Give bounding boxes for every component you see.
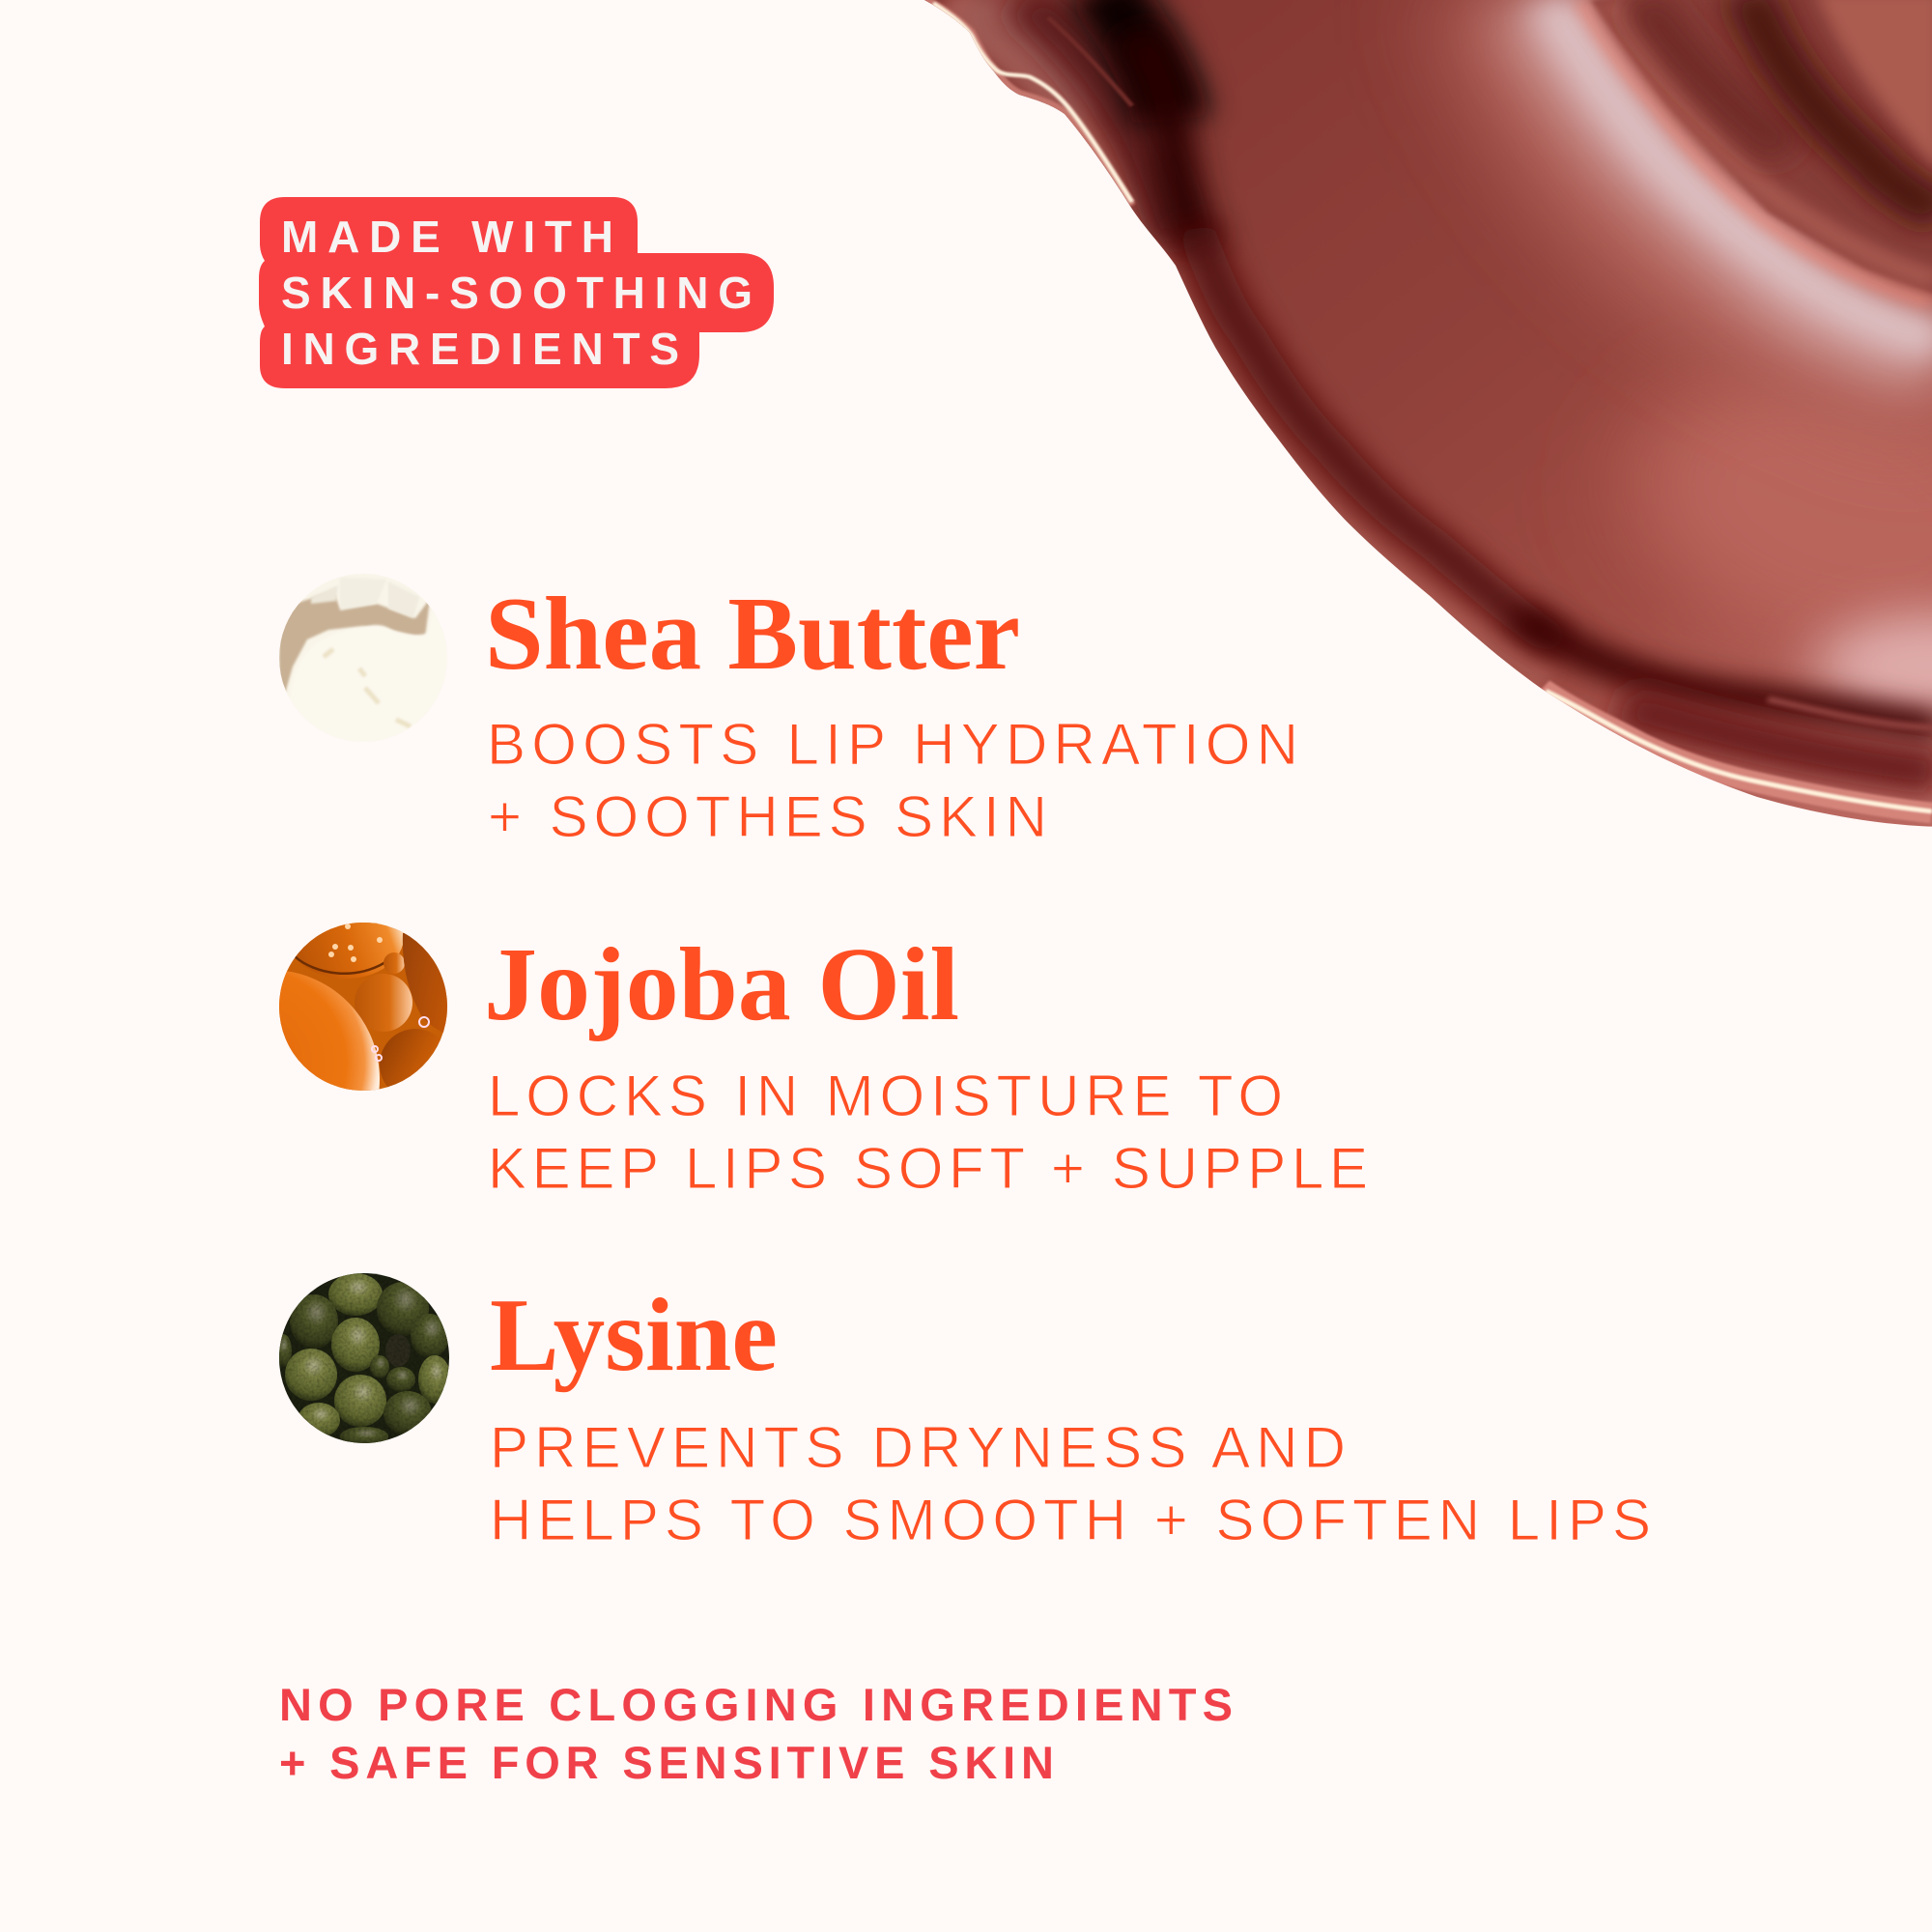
description: jojoba oil: LOCKS IN MOISTURE TO (488, 1064, 1283, 1128)
description: shea butter: BOOSTS LIP HYDRATION (487, 712, 1298, 777)
footer note: NO PORE CLOGGING INGREDIENTS (279, 1679, 1233, 1730)
icon: jojoba oil photo (279, 923, 447, 1091)
description: shea butter: + SOOTHES SKIN (488, 784, 1047, 849)
heading: lysine: Lysine (490, 1278, 778, 1393)
badge text: MADE WITH (281, 212, 613, 262)
ingredient: jojoba oil (279, 923, 1365, 1188)
badge text (281, 212, 753, 374)
description: lysine: HELPS TO SMOOTH + SOFTEN LIPS (490, 1488, 1651, 1552)
icon: shea butter photo (279, 574, 454, 749)
badge text: INGREDIENTS (281, 324, 679, 374)
description: jojoba oil: KEEP LIPS SOFT + SUPPLE (488, 1136, 1368, 1201)
footer note: + SAFE FOR SENSITIVE SKIN (279, 1737, 1054, 1788)
badge: made with skin-soothing ingredients (259, 197, 774, 388)
description: jojoba oil (488, 1064, 1368, 1201)
badge text: SKIN-SOOTHING (281, 268, 753, 318)
ingredient: shea butter (279, 574, 1298, 849)
description: lysine: PREVENTS DRYNESS AND (490, 1415, 1346, 1480)
icon: avocado photo (274, 1273, 451, 1446)
footer note (279, 1679, 1233, 1788)
description: lysine (490, 1415, 1651, 1552)
ingredient: lysine (274, 1273, 1651, 1552)
heading: jojoba oil: Jojoba Oil (484, 927, 959, 1042)
badge background (259, 197, 774, 388)
description: shea butter (487, 712, 1298, 849)
lip balm swatch image (908, 0, 1932, 834)
heading: shea butter: Shea Butter (485, 577, 1020, 692)
